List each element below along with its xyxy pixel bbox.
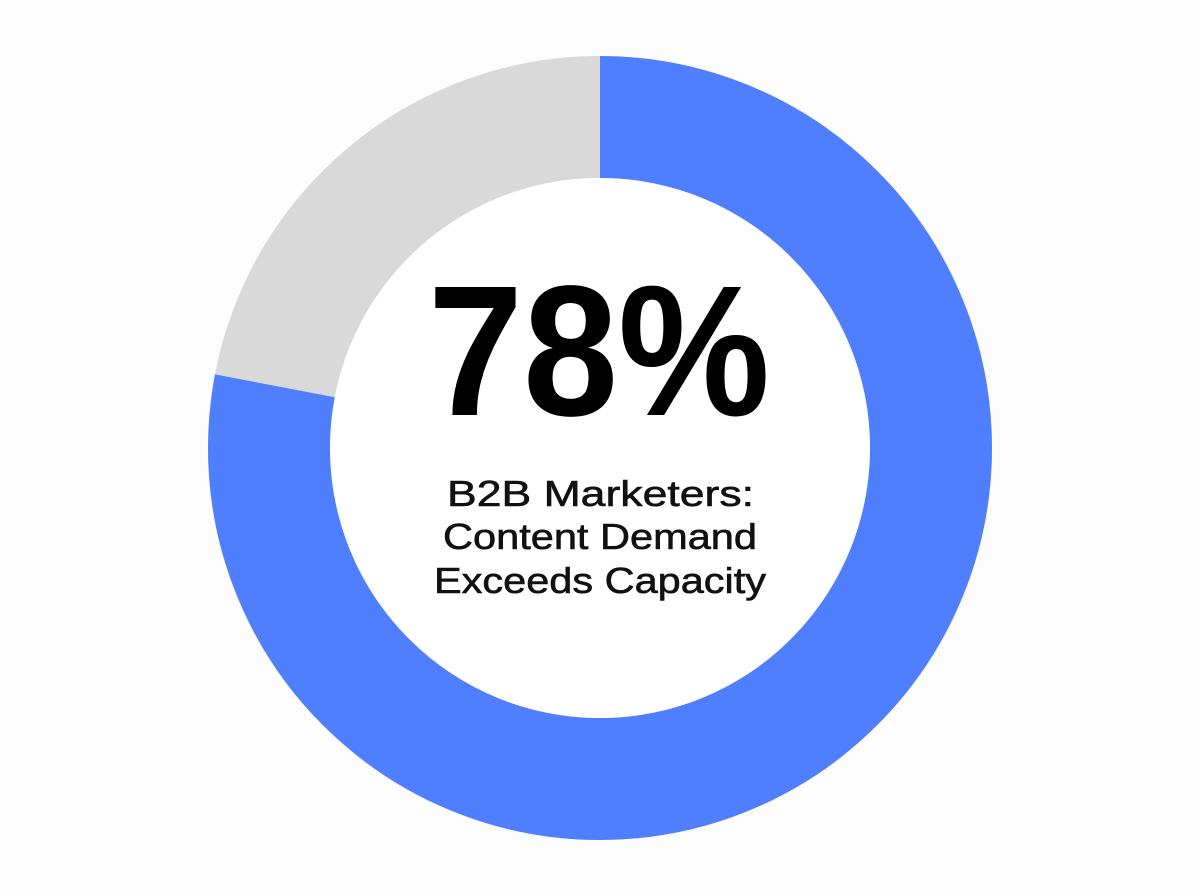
subtitle text: Exceeds Capacity <box>434 560 766 601</box>
ring: 78% segment (blue) <box>269 117 931 779</box>
ring: remaining 22% (gray) <box>269 117 931 779</box>
subtitle text: Content Demand <box>443 516 757 557</box>
inner white disc <box>330 178 870 718</box>
subtitle text: B2B Marketers: <box>447 473 754 514</box>
big percentage: 78% <box>428 248 770 455</box>
subtitle text <box>434 473 766 601</box>
